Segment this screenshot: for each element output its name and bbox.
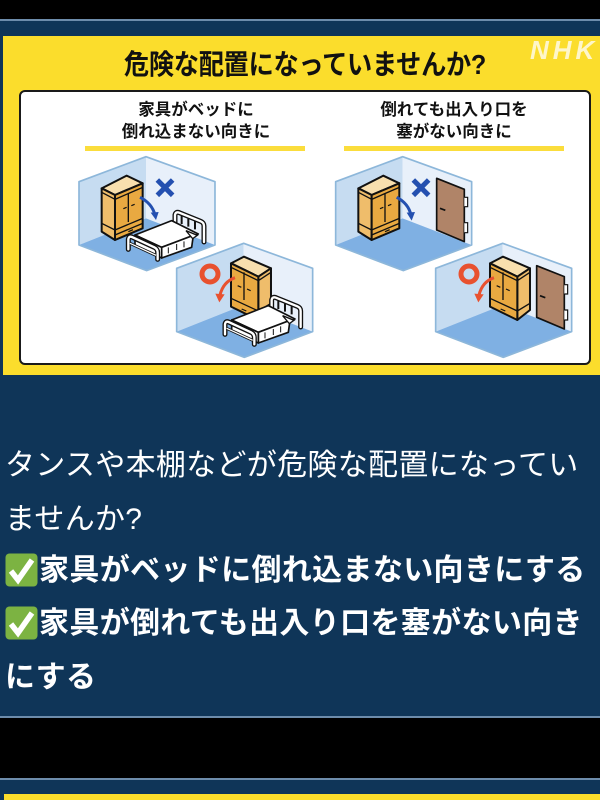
icon: blue cross	[157, 180, 173, 195]
heading: bed orientation: 家具がベッドに	[138, 101, 254, 119]
room: wardrobe can fall on bed (wrong)	[79, 157, 215, 271]
check icon 2	[6, 606, 38, 640]
icon: orange circle	[202, 266, 218, 282]
heading: bed orientation: 倒れ込まない向きに	[122, 122, 270, 140]
heading: exit orientation: 倒れても出入り口を	[380, 101, 528, 119]
checklist item 2 continued: にする	[5, 661, 96, 694]
next card yellow panel	[4, 794, 600, 800]
arrow: falling away from door	[474, 278, 494, 302]
arrow: falling away from bed	[215, 278, 235, 302]
heading: exit orientation	[380, 100, 528, 140]
check icon 1	[6, 554, 38, 586]
arrow: falling toward door	[397, 197, 415, 221]
white content panel	[19, 90, 591, 365]
NHK logo: NHK	[530, 35, 598, 65]
checklist item 2: 家具が倒れても出入り口を塞がない向き	[39, 607, 583, 640]
yellow underline right	[344, 146, 564, 151]
yellow infographic panel	[3, 36, 600, 375]
heading: bed orientation	[122, 100, 270, 140]
checklist item 1: 家具がベッドに倒れ込まない向きにする	[39, 554, 586, 587]
yellow underline left	[85, 146, 305, 151]
icon: blue cross	[413, 180, 429, 195]
icon: orange circle	[461, 266, 477, 282]
title: 危険な配置になっていませんか?	[124, 49, 486, 80]
body text line 1: タンスや本棚などが危険な配置になってい	[5, 449, 579, 482]
room: wardrobe can block door (wrong)	[336, 157, 472, 271]
room: wardrobe falls away from bed (right)	[177, 243, 313, 357]
body text line 2: ませんか?	[5, 503, 142, 536]
heading: exit orientation: 塞がない向きに	[396, 122, 512, 140]
next card navy section	[0, 778, 600, 800]
room: wardrobe does not block door (right)	[436, 243, 572, 357]
arrow: falling toward bed	[140, 197, 159, 220]
